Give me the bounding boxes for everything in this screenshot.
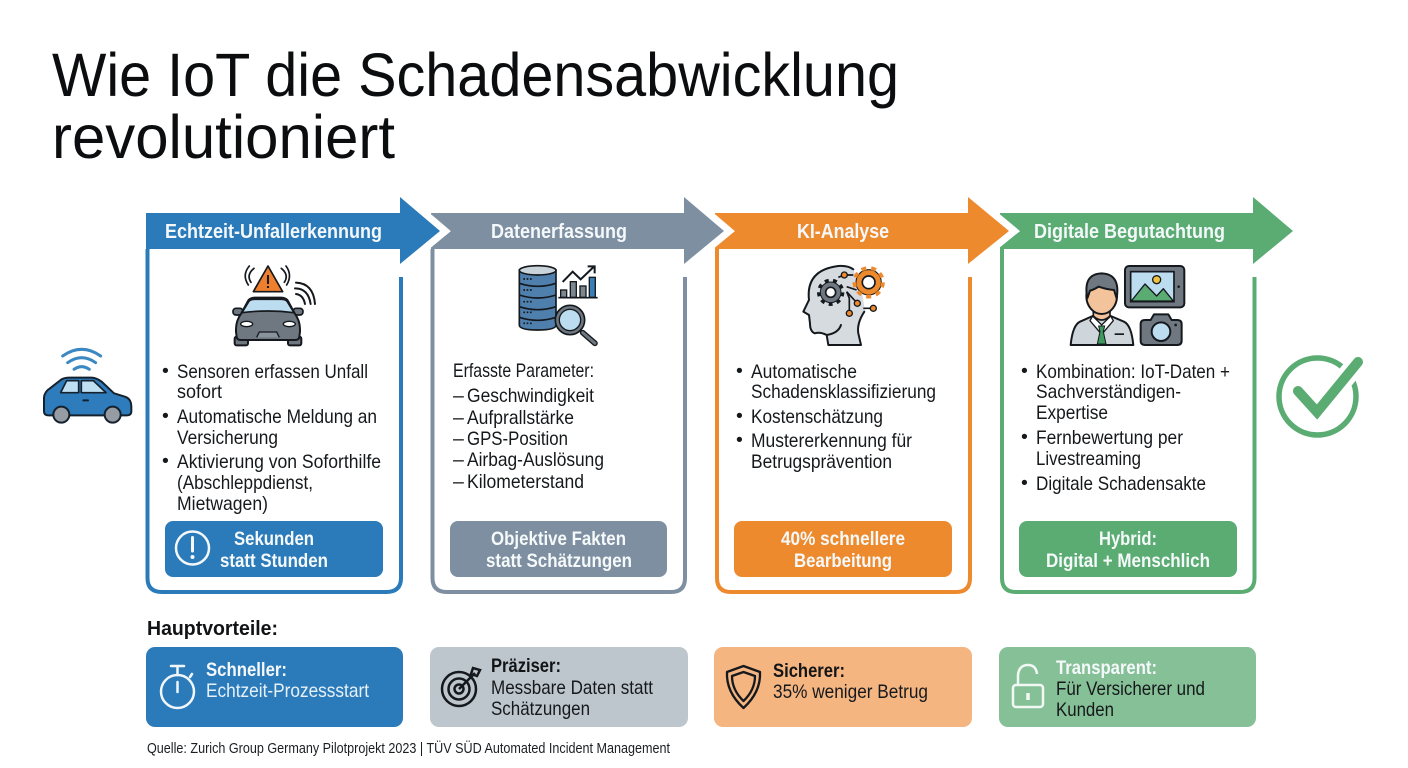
benefit: Transparent: Kunden — [1056, 699, 1114, 721]
icon: stopwatch — [161, 666, 194, 708]
bullet list — [1021, 360, 1230, 495]
parameter list: – — [453, 385, 464, 407]
bullet list: • — [1021, 426, 1028, 448]
callout: 40% schnellere Bearbeitung — [734, 521, 952, 577]
benefit: Transparent: Transparent: — [1056, 657, 1157, 679]
callout: Objektive Fakten: statt Schätzungen — [486, 550, 632, 572]
bullet list: Expertise — [1036, 402, 1108, 424]
bullet list: sofort — [177, 381, 223, 403]
icon: car with warning triangle — [233, 266, 315, 345]
callout: 40% schnellere Bearbeitung: Bearbeitung — [794, 550, 892, 572]
header arrow: Digitale Begutachtung — [1000, 197, 1293, 264]
bullet list: Automatische — [751, 361, 857, 383]
bullet list: Sensoren erfassen Unfall — [177, 361, 368, 383]
bullet list: Schadensklassifizierung — [751, 381, 936, 403]
parameter list: – — [453, 407, 464, 429]
bullet list: Kostenschätzung — [751, 406, 883, 428]
bullet list: • — [1021, 472, 1028, 494]
callout: Sekunden statt Stunden: statt Stunden — [220, 550, 328, 572]
header arrow: Echtzeit-Unfallerkennung: Echtzeit-Unfallerkennung — [165, 221, 382, 243]
benefit: Sicherer — [714, 647, 972, 727]
title: Wie IoT die Schadensabwicklung — [52, 41, 899, 109]
parameter list: Aufprallstärke — [467, 407, 574, 429]
callout: Objektive Fakten: Objektive Fakten — [491, 528, 626, 550]
benefit: Transparent — [999, 647, 1256, 727]
callout: Hybrid — [1019, 521, 1237, 577]
benefit: Sicherer: 35% weniger Betrug — [773, 681, 928, 703]
benefit: Schneller: Echtzeit-Prozessstart — [206, 680, 370, 702]
parameter list: – — [453, 449, 464, 471]
icon: database with chart and magnifier — [519, 266, 598, 343]
parameter list: – — [453, 471, 464, 493]
callout: Hybrid: Digital + Menschlich — [1046, 550, 1210, 572]
bullet list: • — [1021, 360, 1028, 382]
bullet list: • — [736, 429, 743, 451]
bullet list: Livestreaming — [1036, 448, 1141, 470]
parameter list: GPS-Position — [467, 428, 568, 450]
bullet list: Digitale Schadensakte — [1036, 473, 1206, 495]
card outline — [717, 249, 970, 592]
parameter list: Erfasste Parameter: — [453, 360, 594, 382]
heading: Hauptvorteile: Hauptvorteile: — [147, 618, 278, 640]
header arrow: Digitale Begutachtung: Digitale Begutachtung — [1034, 221, 1225, 243]
panel: Echtzeit-Unfallerkennung — [146, 197, 440, 592]
title — [52, 41, 899, 171]
benefit: Präziser: Präziser: — [491, 655, 561, 677]
icon: target with arrow — [442, 668, 480, 706]
bullet list — [736, 360, 936, 473]
icon: open padlock — [1013, 665, 1043, 707]
bullet list: Sachverständigen- — [1036, 381, 1181, 403]
panel: Datenerfassung — [431, 197, 724, 592]
bullet list: Aktivierung von Soforthilfe — [177, 451, 381, 473]
callout: Sekunden statt Stunden — [165, 521, 383, 577]
icon: shield — [727, 666, 760, 708]
source line: Quelle: Zurich Group Germany Pilotprojekt 2023 | TÜV SÜD Automated Incident Management — [147, 739, 670, 757]
parameter list: Kilometerstand — [467, 471, 584, 493]
benefit: Sicherer: Sicherer: — [773, 660, 845, 682]
bullet list: • — [162, 360, 169, 382]
benefit: Schneller: Schneller: — [206, 659, 287, 681]
header arrow: KI-Analyse — [715, 197, 1009, 264]
bullet list: Mietwagen) — [177, 493, 268, 515]
bullet list: Betrugsprävention — [751, 451, 892, 473]
icon: expert with tablet and camera — [1071, 266, 1184, 345]
bullet list: • — [736, 405, 743, 427]
bullet list: Fernbewertung per — [1036, 427, 1183, 449]
callout: Hybrid: Hybrid: — [1099, 528, 1157, 550]
bullet list: Versicherung — [177, 427, 278, 449]
bullet list: Automatische Meldung an — [177, 406, 377, 428]
benefit: Präziser: Messbare Daten statt — [491, 677, 654, 699]
header arrow: Datenerfassung — [431, 197, 724, 264]
bullet list: • — [736, 360, 743, 382]
bullet list: Mustererkennung für — [751, 430, 912, 452]
card outline — [148, 249, 401, 592]
header arrow: Echtzeit-Unfallerkennung — [146, 197, 440, 264]
header arrow: Datenerfassung: Datenerfassung — [491, 221, 627, 243]
panel: Digitale Begutachtung — [1000, 197, 1293, 592]
benefit: Präziser — [430, 647, 688, 727]
title: revolutioniert — [52, 103, 395, 171]
benefit: Schneller — [146, 647, 403, 727]
bullet list — [162, 360, 381, 515]
callout: Objektive Fakten — [450, 521, 667, 577]
parameter list — [453, 360, 604, 493]
card outline — [1002, 249, 1254, 592]
benefit: Präziser: Schätzungen — [491, 698, 590, 720]
parameter list: Airbag-Auslösung — [467, 449, 604, 471]
parameter list: – — [453, 428, 464, 450]
icon: green check mark — [1279, 358, 1358, 435]
bullet list: • — [162, 405, 169, 427]
header arrow: KI-Analyse: KI-Analyse — [797, 221, 889, 243]
callout: 40% schnellere Bearbeitung: 40% schnellere — [781, 528, 905, 550]
card outline — [432, 249, 685, 592]
icon: connected car — [44, 349, 131, 423]
parameter list: Geschwindigkeit — [467, 385, 595, 407]
bullet list: Kombination: IoT-Daten + — [1036, 361, 1230, 383]
bullet list: • — [162, 450, 169, 472]
panel: KI-Analyse — [715, 197, 1009, 592]
bullet list: (Abschleppdienst, — [177, 472, 313, 494]
icon: AI head with gears — [803, 266, 883, 345]
callout: Sekunden statt Stunden: Sekunden — [234, 528, 314, 550]
benefit: Transparent: Für Versicherer und — [1056, 678, 1205, 700]
